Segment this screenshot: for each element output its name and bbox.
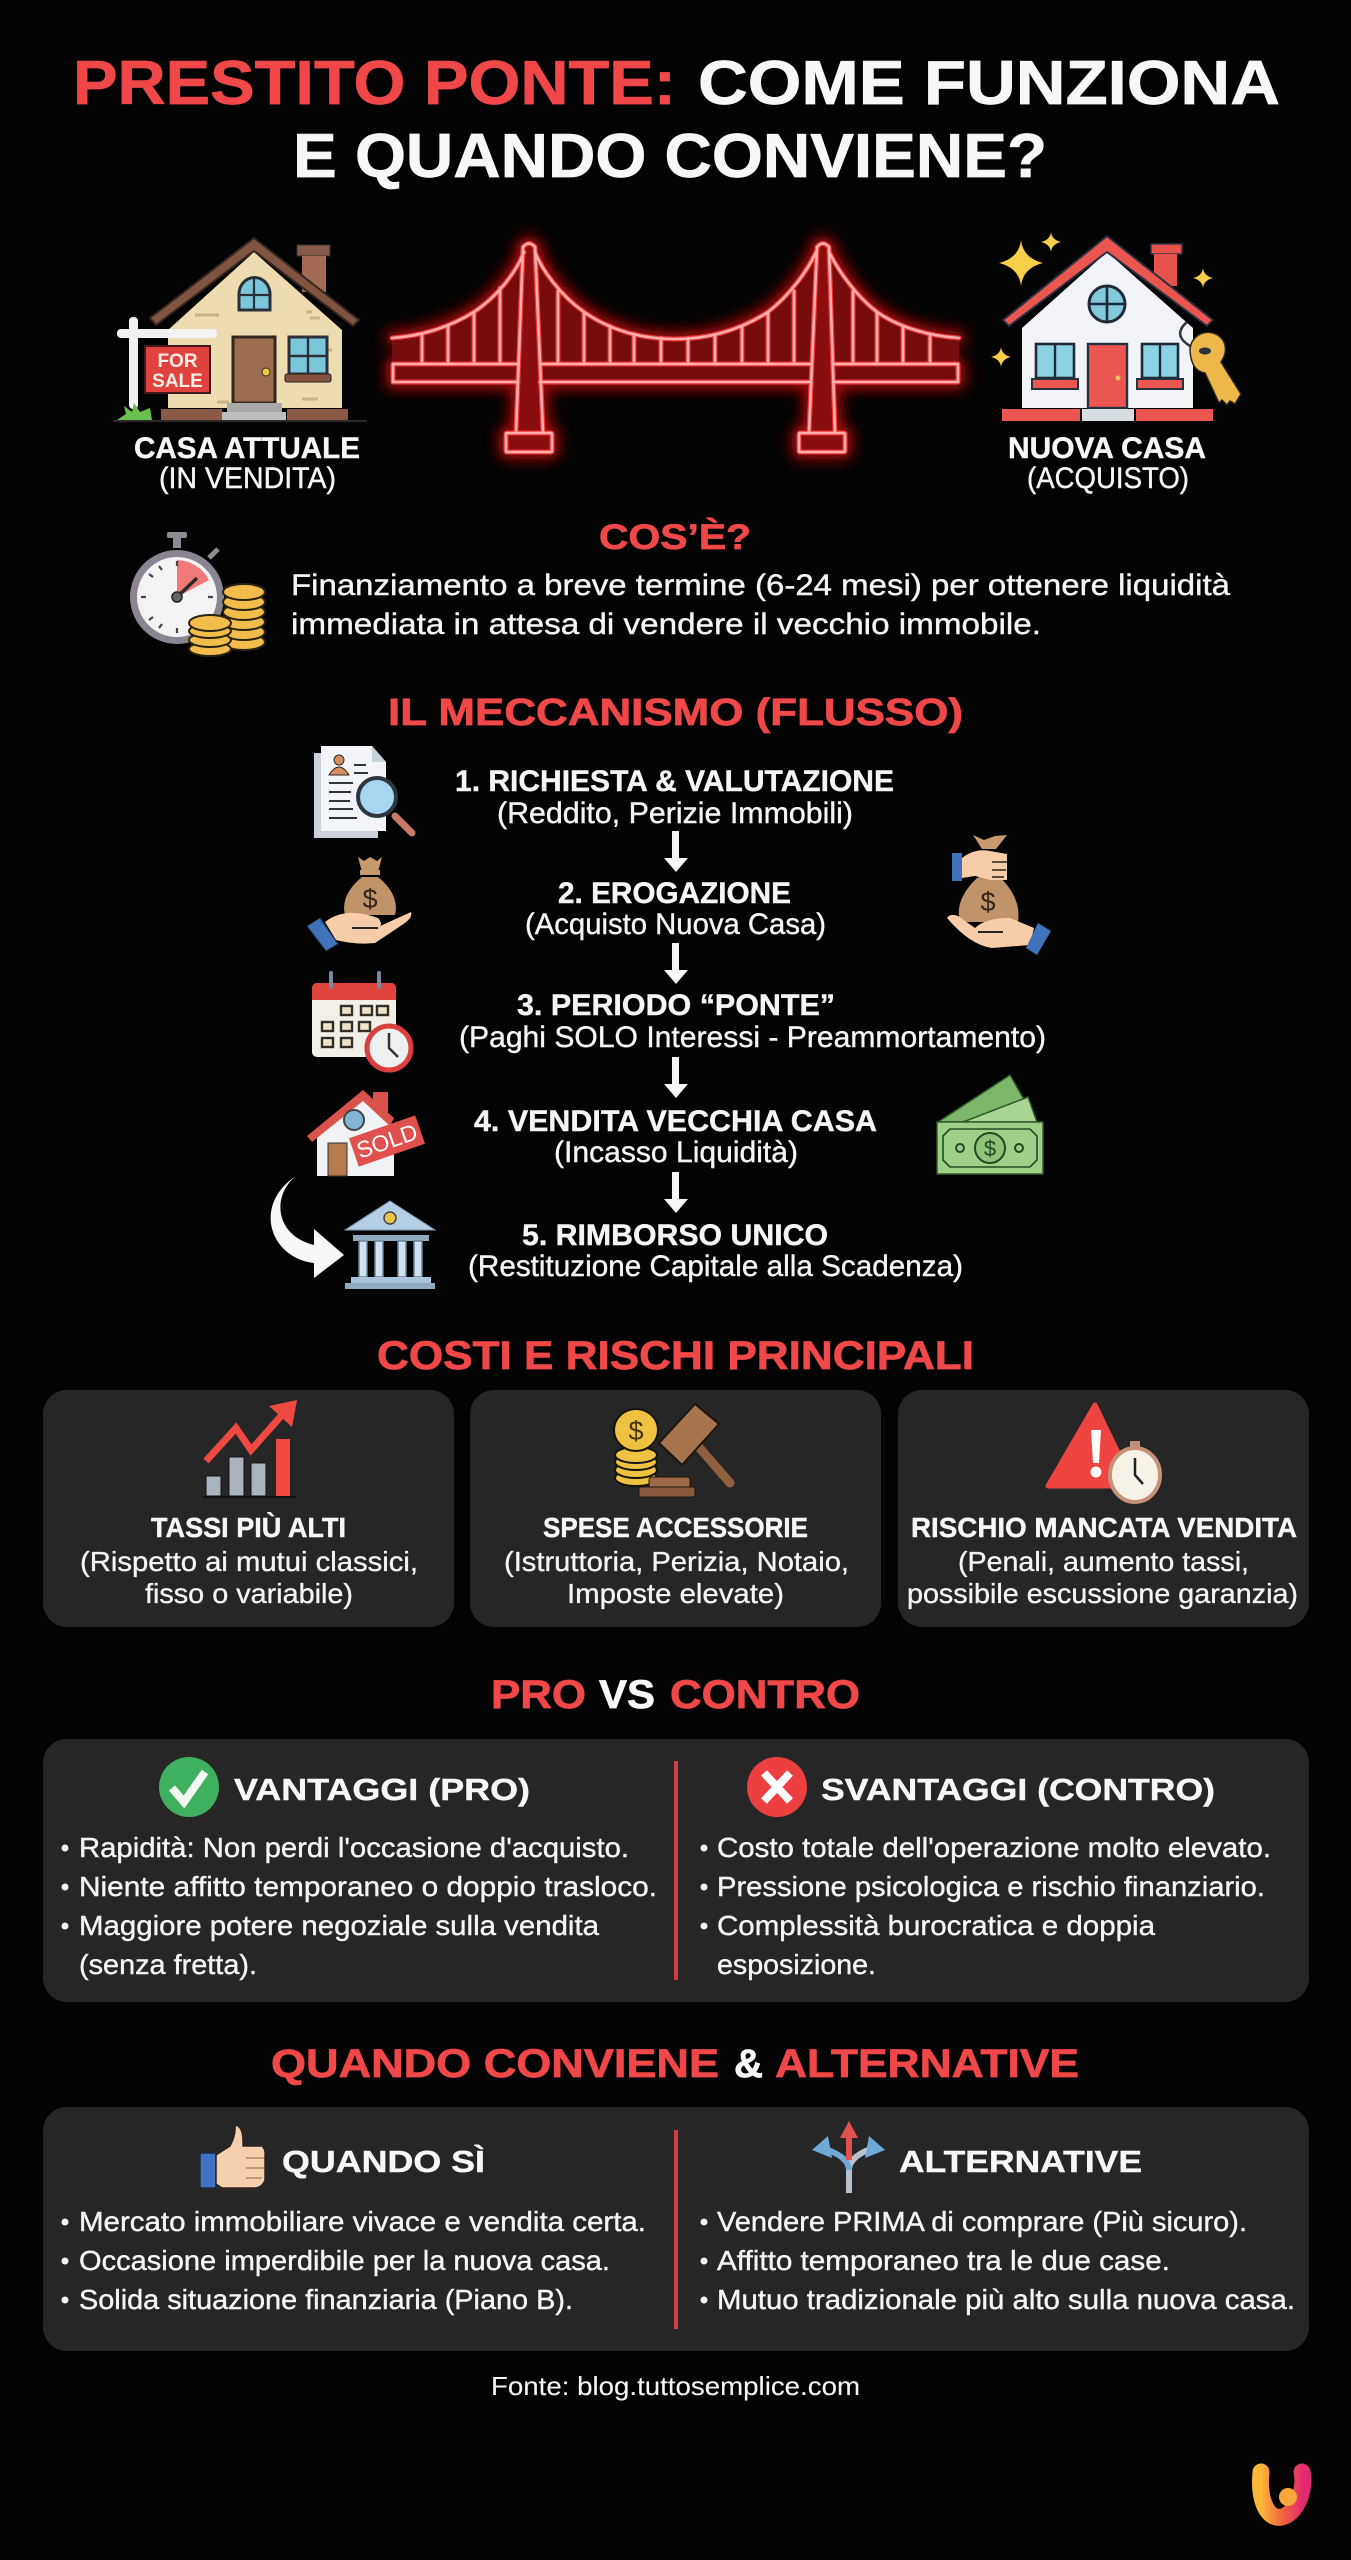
list: advantages xyxy=(62,1832,657,1980)
label: current house: (IN VENDITA) xyxy=(159,462,336,495)
card: higher rates xyxy=(43,1390,454,1627)
icon: stack of banknotes: $ xyxy=(984,1136,996,1161)
step 4: 4. VENDITA VECCHIA CASA xyxy=(474,1105,877,1138)
icon: new house with key xyxy=(991,232,1241,421)
panel: pros and cons xyxy=(43,1739,1309,2002)
list: advantages: Rapidità: Non perdi l'occasione d'acquisto. xyxy=(79,1832,629,1863)
step 3 xyxy=(459,989,1046,1054)
label: new house: NUOVA CASA xyxy=(1008,432,1206,465)
card text: SPESE ACCESSORIE xyxy=(543,1512,808,1543)
card: accessory costs xyxy=(470,1390,881,1627)
title: COME FUNZIONA xyxy=(698,49,1280,118)
step 5 xyxy=(468,1219,963,1283)
heading: when it pays and alternatives: & xyxy=(734,2042,763,2086)
icon: stack of banknotes xyxy=(937,1075,1043,1174)
card text: (Penali, aumento tassi, xyxy=(958,1546,1249,1577)
heading: when it pays and alternatives: ALTERNATIVE xyxy=(775,2042,1079,2086)
list: when yes: Occasione imperdibile per la nuova casa. xyxy=(79,2245,610,2276)
icon: coins and gavel: $ xyxy=(628,1416,644,1446)
title: PRESTITO PONTE: xyxy=(73,49,676,118)
list: advantages: (senza fretta). xyxy=(79,1949,257,1980)
list: when yes xyxy=(62,2206,646,2315)
title xyxy=(73,49,1280,191)
arrow: curved to bank xyxy=(271,1176,344,1278)
icon: thumbs up xyxy=(200,2125,265,2188)
arrow 4 xyxy=(664,1172,688,1213)
list: alternatives: Affitto temporaneo tra le due case. xyxy=(717,2245,1170,2276)
icon: money bag on hand, left: $ xyxy=(362,884,378,914)
heading: costs and risks: COSTI E RISCHI PRINCIPALI xyxy=(377,1334,974,1378)
step 1: 1. RICHIESTA & VALUTAZIONE xyxy=(455,765,894,798)
heading: when it pays and alternatives: QUANDO CONVIENE xyxy=(271,2042,719,2086)
list: when yes: Mercato immobiliare vivace e vendita certa. xyxy=(79,2206,646,2237)
card text: (Rispetto ai mutui classici, xyxy=(80,1546,418,1577)
label: new house xyxy=(1008,432,1206,495)
label: current house: CASA ATTUALE xyxy=(134,432,360,465)
list: disadvantages: Complessità burocratica e doppia xyxy=(717,1910,1155,1941)
icon: sold house: SOLD xyxy=(353,1119,421,1163)
icon: warning triangle and stopwatch xyxy=(1048,1405,1160,1502)
heading: when it pays and alternatives xyxy=(271,2042,1079,2086)
step 3: (Paghi SOLO Interessi - Preammortamento) xyxy=(459,1021,1046,1054)
card text xyxy=(504,1512,849,1609)
heading: disadvantages: SVANTAGGI (CONTRO) xyxy=(821,1772,1215,1807)
icon: rising chart xyxy=(203,1400,297,1497)
card text: TASSI PIÙ ALTI xyxy=(151,1512,346,1543)
list: alternatives: Vendere PRIMA di comprare (Più sicuro). xyxy=(717,2206,1247,2237)
arrow 3 xyxy=(664,1057,688,1098)
icon: bank xyxy=(345,1201,435,1289)
card text: RISCHIO MANCATA VENDITA xyxy=(911,1512,1297,1543)
icon: money bag on hand, left xyxy=(307,857,411,951)
card text: Imposte elevate) xyxy=(567,1578,784,1609)
card: failed sale risk xyxy=(898,1390,1309,1627)
heading: when yes: QUANDO SÌ xyxy=(282,2144,485,2179)
card text xyxy=(80,1512,418,1609)
arrow 2 xyxy=(664,943,688,984)
icon: coins and gavel xyxy=(614,1404,730,1497)
heading: pro vs contro xyxy=(491,1673,860,1717)
heading: pro vs contro: PRO xyxy=(491,1673,586,1717)
list: alternatives: Mutuo tradizionale più alto sulla nuova casa. xyxy=(717,2284,1295,2315)
label: new house: (ACQUISTO) xyxy=(1027,462,1189,495)
card text xyxy=(907,1512,1298,1609)
step 1 xyxy=(455,765,894,830)
icon: red cross xyxy=(747,1757,807,1817)
step 3: 3. PERIODO “PONTE” xyxy=(517,989,835,1022)
list: advantages: Niente affitto temporaneo o doppio trasloco. xyxy=(79,1871,657,1902)
list: when yes: Solida situazione finanziaria (Piano B). xyxy=(79,2284,573,2315)
heading: cos'è: COS’È? xyxy=(599,517,751,557)
icon: stopwatch and coins xyxy=(130,532,265,656)
icon: sold house xyxy=(307,1090,425,1176)
step 5: (Restituzione Capitale alla Scadenza) xyxy=(468,1250,963,1283)
icon: hand holding money bag, right: $ xyxy=(980,887,996,917)
step 2: (Acquisto Nuova Casa) xyxy=(525,908,826,941)
label: current house xyxy=(134,432,360,495)
list: disadvantages xyxy=(700,1832,1271,1980)
icon: neon suspension bridge xyxy=(392,243,959,452)
step 2: 2. EROGAZIONE xyxy=(558,877,791,910)
icon: hand holding money bag, right xyxy=(947,835,1051,955)
title: E QUANDO CONVIENE? xyxy=(293,122,1047,191)
heading: pro vs contro: VS xyxy=(599,1673,655,1717)
card text: fisso o variabile) xyxy=(145,1578,353,1609)
heading: mechanism: IL MECCANISMO (FLUSSO) xyxy=(388,692,963,734)
source: Fonte: blog.tuttosemplice.com xyxy=(491,2371,860,2401)
text: definition: immediata in attesa di vendere il vecchio immobile. xyxy=(291,608,1041,641)
heading: pro vs contro: CONTRO xyxy=(670,1673,860,1717)
icon: calendar with clock xyxy=(312,973,411,1070)
card text: (Istruttoria, Perizia, Notaio, xyxy=(504,1546,849,1577)
card text: possibile escussione garanzia) xyxy=(907,1578,1298,1609)
step 1: (Reddito, Perizie Immobili) xyxy=(497,797,853,830)
icon: current house for sale: FOR xyxy=(157,351,198,372)
panel: when and alternatives xyxy=(43,2107,1309,2351)
text: definition xyxy=(291,569,1230,641)
step 4 xyxy=(474,1105,877,1169)
step 5: 5. RIMBORSO UNICO xyxy=(522,1219,828,1252)
flow: mechanism steps xyxy=(455,765,1046,1283)
logo xyxy=(1261,2472,1303,2517)
list: alternatives xyxy=(700,2206,1295,2315)
list: disadvantages: Costo totale dell'operazione molto elevato. xyxy=(717,1832,1271,1863)
step 4: (Incasso Liquidità) xyxy=(554,1136,798,1169)
heading: alternatives: ALTERNATIVE xyxy=(899,2144,1142,2179)
heading: advantages: VANTAGGI (PRO) xyxy=(234,1772,530,1807)
icon: document with magnifier xyxy=(314,746,412,838)
icon: current house for sale xyxy=(113,238,367,422)
icon: current house for sale: SALE xyxy=(152,371,203,392)
arrow 1 xyxy=(664,831,688,872)
list: advantages: Maggiore potere negoziale sulla vendita xyxy=(79,1910,599,1941)
icon: branching arrows xyxy=(812,2121,885,2193)
list: disadvantages: esposizione. xyxy=(717,1949,876,1980)
list: disadvantages: Pressione psicologica e rischio finanziario. xyxy=(717,1871,1265,1902)
icon: green check xyxy=(159,1757,219,1817)
text: definition: Finanziamento a breve termine (6-24 mesi) per ottenere liquidità xyxy=(291,569,1230,602)
step 2 xyxy=(525,877,826,941)
